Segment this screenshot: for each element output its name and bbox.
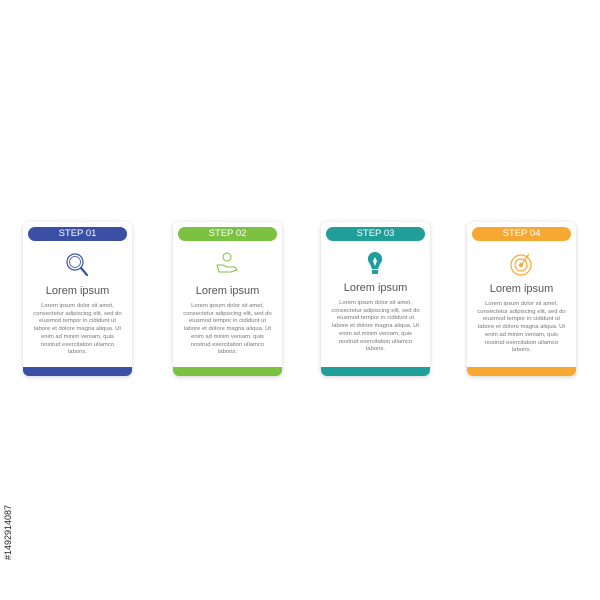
icon: magnifier xyxy=(66,253,88,276)
pill: step 02: STEP 02 xyxy=(209,228,246,239)
heading: Lorem ipsum xyxy=(46,285,109,297)
icon: target xyxy=(510,254,532,276)
heading: Lorem ipsum xyxy=(490,283,553,295)
card: step 01 xyxy=(23,222,132,376)
card: step 03 xyxy=(321,222,430,376)
card: step 04 xyxy=(467,222,576,376)
icon: light bulb xyxy=(368,252,382,274)
pill: step 03: STEP 03 xyxy=(357,228,394,239)
pill: step 04 xyxy=(472,227,571,241)
text: Lorem ipsum dolor sit amet, consectetur adipiscing elit, sed do eiusmod tempor in cididunt ut labore et dolore magna aliqua. Ut enim ad minim veniam, quis nostrud exercitation ullamco laboris. xyxy=(331,300,420,352)
heading: Lorem ipsum xyxy=(196,285,259,297)
pill: step 01: STEP 01 xyxy=(59,228,96,239)
side id text: #1492914087 xyxy=(3,505,13,560)
text: Lorem ipsum dolor sit amet, consectetur adipiscing elit, sed do eiusmod tempor in cididunt ut labore et dolore magna aliqua. Ut enim ad minim veniam, quis nostrud exercitation ullamco laboris. xyxy=(183,303,272,355)
icon: hand with coin xyxy=(216,252,238,272)
card: step 02 xyxy=(173,222,282,376)
heading: Lorem ipsum xyxy=(344,282,407,294)
pill: step 04: STEP 04 xyxy=(503,228,540,239)
text: Lorem ipsum dolor sit amet, consectetur adipiscing elit, sed do eiusmod tempor in cididunt ut labore et dolore magna aliqua. Ut enim ad minim veniam, quis nostrud exercitation ullamco laboris. xyxy=(33,303,122,355)
pill: step 03 xyxy=(326,227,425,241)
pill: step 02 xyxy=(178,227,277,241)
pill: step 01 xyxy=(28,227,127,241)
text: Lorem ipsum dolor sit amet, consectetur adipiscing elit, sed do eiusmod tempor in cididunt ut labore et dolore magna aliqua. Ut enim ad minim veniam, quis nostrud exercitation ullamco laboris. xyxy=(477,301,566,353)
